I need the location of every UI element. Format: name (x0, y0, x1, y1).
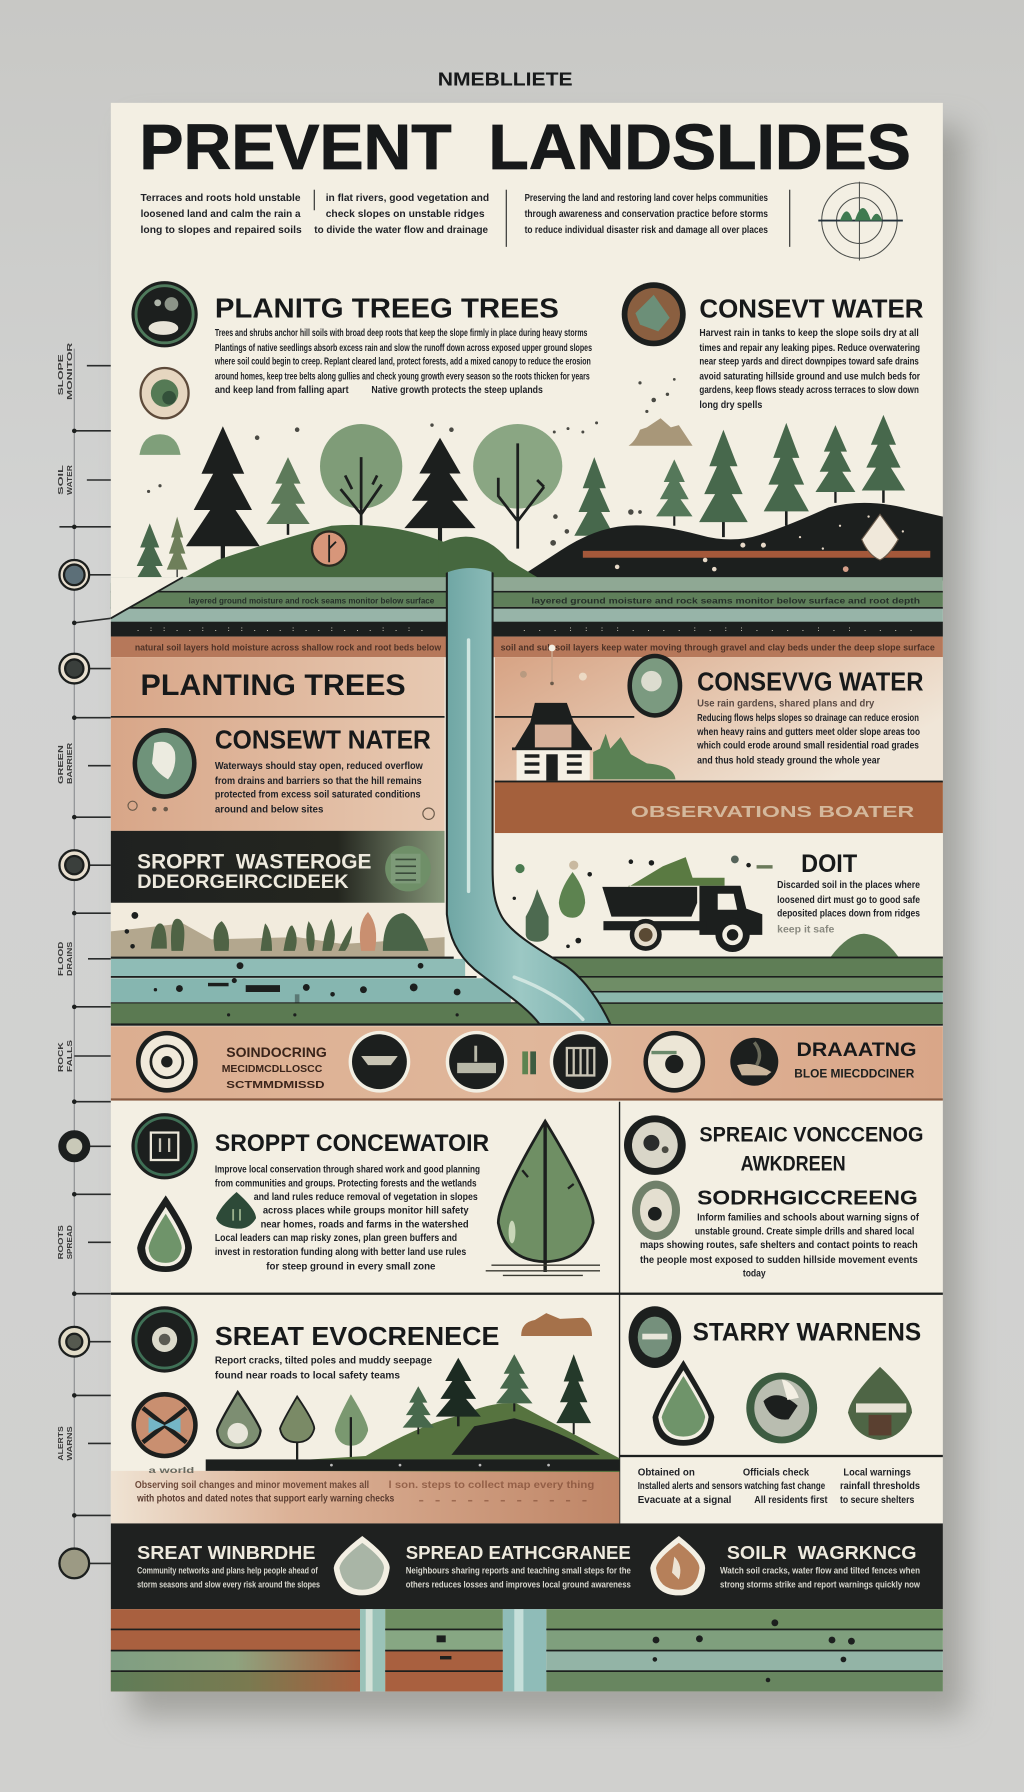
body: doit: deposited places down from ridges (777, 909, 920, 920)
timeline labels: FALLS (65, 1040, 74, 1072)
heading: evidence: SREAT EVOCRENECE (215, 1321, 499, 1351)
body: evidence: Report cracks, tilted poles and muddy seepage (215, 1355, 432, 1366)
soil base (111, 1471, 619, 1523)
section: conserve water (622, 282, 923, 411)
icon: footer peach drop (650, 1536, 705, 1595)
body: conserve left (215, 761, 423, 816)
heading: planting: PLANITG TREEG TREES (215, 293, 559, 324)
heading: support: SROPPT CONCEWATOIR (215, 1130, 489, 1157)
body: speak: maps showing routes, safe shelters and contact points to reach (640, 1240, 918, 1251)
panel: speak awareness (624, 1115, 923, 1280)
icon: brown hill (521, 1313, 592, 1336)
body: warnings columns: Evacuate at a signal (638, 1495, 732, 1506)
body: conserve: long dry spells (699, 400, 763, 411)
timeline labels: MONITOR (65, 342, 74, 400)
heading: warnings: STARRY WARNENS (693, 1319, 921, 1347)
body: planting: around homes, keep tree belts along gullies and check young growth every season so the roots thicken for years (215, 371, 590, 382)
icon: black badge 3 (446, 1031, 507, 1093)
panel: icon strip (111, 1026, 943, 1098)
section: planting trees (131, 281, 592, 418)
body: speak: today (743, 1269, 766, 1280)
body: doit (777, 880, 920, 936)
body: soil text: a world (149, 1466, 194, 1475)
body: support: across places while groups monitor hill safety (263, 1206, 469, 1217)
heading: conserve left: CONSEWT NATER (215, 725, 431, 755)
body: conserve left: protected from excess soil saturated conditions (215, 790, 421, 801)
icon: lamp mark (520, 645, 587, 685)
body: conserving: Reducing flows helps slopes so drainage can reduce erosion (697, 713, 919, 724)
body: planting: and keep land from falling apart (215, 385, 349, 396)
text: strip block right (794, 1039, 917, 1081)
intro text: check slopes on unstable ridges (326, 209, 485, 220)
body: evidence (215, 1355, 432, 1381)
subheading: awareness: AWKDREEN (741, 1150, 846, 1175)
icon: warnings badge (629, 1306, 681, 1368)
heading: planting band: PLANTING TREES (141, 669, 406, 702)
body: conserve: near steep yards and direct downpipes toward safe drains (699, 357, 919, 368)
body: conserving: when heavy rains and gutters meet older slope areas too (696, 727, 920, 738)
timeline labels: DRAINS (65, 942, 74, 976)
body: support: and land rules reduce removal of vegetation in slopes (254, 1192, 478, 1203)
round trees (320, 424, 562, 549)
strip bottom rule (111, 1098, 943, 1101)
bottom strata (111, 1609, 943, 1691)
icon: bottle drop (526, 889, 549, 942)
icon: big leaf tree (498, 1121, 593, 1272)
body: warnings columns: Obtained on (638, 1467, 695, 1478)
icon: cream badge 5 (643, 1031, 705, 1093)
strata small text: . : : . . : . : : . . . : . . : . . . : . : . (137, 626, 423, 633)
panel: support waste storage (111, 831, 445, 903)
hill black layer (206, 1459, 619, 1471)
text: strip block right: BLOE MIECDDCINER (794, 1067, 915, 1081)
river source on hill (439, 539, 507, 576)
body: support: near homes, roads and farms in the watershed (261, 1219, 469, 1230)
timeline labels: GREEN (56, 745, 65, 784)
body: conserve: Harvest rain in tanks to keep the slope soils dry at all (699, 328, 919, 339)
heading: footer right: SOILR WAGRKNCG (727, 1542, 917, 1563)
intro dividers (314, 190, 790, 247)
intro text: Preserving the land and restoring land cover helps communities (525, 193, 768, 204)
icon: leaf badge (848, 1367, 912, 1440)
tree line (133, 415, 905, 594)
panel: planting trees band (111, 657, 445, 717)
timeline labels (56, 342, 74, 1461)
body: conserve: gardens, keep flows steady across terraces to slow down (699, 385, 919, 396)
poster shadow (131, 126, 963, 1717)
body: support: for steep ground in every small zone (266, 1262, 436, 1273)
divider band line (111, 716, 445, 718)
strata small text (135, 596, 935, 652)
timeline labels: WARNS (65, 1426, 74, 1461)
body: warnings columns: Installed alerts and sensors watching fast change (638, 1481, 825, 1492)
panel: conserve water left (111, 718, 445, 831)
illustration: plants strip (111, 903, 445, 957)
icon: compass map (818, 182, 903, 261)
body: soil text: Observing soil changes and minor movement makes all (135, 1480, 369, 1491)
body: warnings columns: rainfall thresholds (840, 1481, 920, 1492)
text: strip block left (222, 1045, 327, 1091)
body: conserving: Use rain gardens, shared plans and dry (697, 698, 875, 709)
text: strip block left: MECIDMCDLLOSCC (222, 1064, 323, 1075)
strata small text: layered ground moisture and rock seams monitor below surface and root depth (531, 596, 920, 605)
strata small text: layered ground moisture and rock seams monitor below surface (189, 596, 435, 605)
body: soil text: l son. steps to collect map every thing (389, 1480, 594, 1491)
hill corner edge (111, 577, 183, 618)
timeline labels: ROOTS (56, 1225, 65, 1259)
body: planting (214, 328, 592, 396)
body: support: from communities and groups. Protecting forests and the wetlands (215, 1178, 477, 1189)
body: warnings columns: All residents first (754, 1495, 828, 1506)
body: conserve: avoid saturating hillside ground and use mulch beds for (699, 371, 920, 382)
warnings rule (619, 1455, 943, 1457)
body: footer right: strong storms strike and report warnings quickly now (720, 1579, 921, 1589)
strata small text: soil and sub soil layers keep water moving through gravel and clay beds under the deep slope surface (501, 642, 935, 652)
icon: small badge (632, 1181, 680, 1240)
bottom water channels (360, 1609, 546, 1691)
intro text: Terraces and roots hold unstable (141, 193, 301, 204)
panel: starry warnings (629, 1306, 921, 1446)
icon: square badge (131, 1113, 198, 1179)
icon: peach hill seal (312, 531, 346, 566)
body: warnings columns: to secure shelters (840, 1495, 915, 1506)
intro text: to reduce individual disaster risk and damage all over places (525, 225, 768, 236)
icon: water badge (622, 282, 686, 346)
underground strata (111, 577, 943, 657)
pines on hill (403, 1354, 591, 1434)
body: footer middle: others reduces losses and improves local ground awareness (406, 1579, 631, 1589)
heading: conserving: CONSEVVG WATER (697, 666, 923, 696)
panel: dirt truck (495, 833, 943, 957)
strata small text: natural soil layers hold moisture across shallow rock and root beds below (135, 642, 442, 652)
body: planting: Trees and shrubs anchor hill soils with broad deep roots that keep the slope firmly in place during heavy storms (215, 328, 588, 339)
body: planting: where soil could begin to creep. Replant cleared land, protect forests, add a mixed canopy to reduce the erosion (214, 357, 591, 368)
icon: large drop (653, 1360, 714, 1446)
icon: dump truck (602, 857, 762, 952)
icon: green bar (522, 1051, 536, 1074)
hill corner cutout (111, 577, 183, 618)
icon: green sheet badge (385, 846, 431, 891)
heading: sodr: SODRHGICCREENG (697, 1187, 918, 1210)
body: speak: Inform families and schools about warning signs of (697, 1213, 919, 1224)
body: planting: Native growth protects the steep uplands (371, 385, 543, 396)
icon: green drop (559, 872, 585, 918)
river highlight (469, 640, 583, 1019)
intro text: to divide the water flow and drainage (314, 225, 488, 236)
body: planting: Plantings of native seedlings absorb excess rain and slow the runoff down across exposed upper ground slopes (215, 343, 592, 354)
heading: footer middle: SPREAD EATHCGRANEE (406, 1542, 631, 1563)
body: doit: loosened dirt must go to good safe (777, 895, 920, 906)
hill (234, 1403, 619, 1472)
body: footer right: Watch soil cracks, water flow and tilted fences when (720, 1566, 920, 1576)
body: doit: keep it safe (777, 925, 835, 936)
body: soil text (135, 1466, 594, 1505)
body: support: Local leaders can map risky zones, plan green buffers and (215, 1233, 457, 1244)
river bed bands right (537, 957, 943, 1024)
text: strip block right: DRAAATNG (797, 1039, 917, 1061)
icon: awareness badge (624, 1115, 686, 1175)
icon: footer drop (334, 1536, 390, 1595)
intro text: long to slopes and repaired soils (141, 225, 302, 236)
body: footer middle: Neighbours sharing reports and teaching small steps for the (406, 1566, 631, 1576)
body: conserving: which could erode around small residential road grades (696, 741, 919, 752)
panel: spread evidence (111, 1306, 619, 1523)
icon: compass badge (131, 1392, 198, 1458)
icon: photo badge (746, 1373, 817, 1443)
text: strip block left: SCTMMDMISSD (226, 1080, 325, 1091)
body: doit: Discarded soil in the places where (777, 880, 920, 891)
body: speak: the people most exposed to sudden hillside movement events (640, 1255, 918, 1266)
text: strip block left: SOINDOCRING (226, 1045, 327, 1060)
icon: black badge 2 (349, 1031, 410, 1093)
heading: waste: SROPRT WASTEROGE (137, 849, 371, 874)
body: footer middle (406, 1566, 631, 1589)
timeline node icons (59, 560, 89, 1578)
icon: brown mountain (629, 418, 693, 446)
heading: doit: DOIT (801, 850, 858, 878)
hills (111, 503, 943, 617)
timeline labels: SLOPE (56, 354, 65, 395)
body: warnings columns: Local warnings (843, 1467, 911, 1478)
doodle: small marks (128, 801, 434, 819)
icon: small green hill (831, 934, 898, 957)
panel: black footer band (111, 1523, 943, 1609)
heading: speak: SPREAIC VONCCENOG (699, 1122, 923, 1147)
timeline labels: ROCK (56, 1041, 65, 1072)
body: conserve left: around and below sites (215, 805, 324, 816)
icon: green drop (137, 1195, 192, 1272)
body: speak (640, 1213, 919, 1280)
icon: black badge 4 (550, 1031, 611, 1093)
body: soil text: . . . . . . . . . . . (417, 1494, 589, 1505)
icon: planting badge (131, 281, 198, 347)
body: evidence: found near roads to local safety teams (215, 1370, 400, 1381)
icon: white leaf (862, 514, 898, 560)
title: PREVENT LANDSLIDES (139, 111, 911, 183)
body: footer left (137, 1566, 320, 1589)
icon: small leaf medallion (141, 368, 189, 418)
icon: cream badge 1 (136, 1031, 198, 1093)
top label: NMEBLLIETE (438, 69, 573, 90)
black hill (514, 503, 943, 581)
intro text: in flat rivers, good vegetation and (326, 193, 489, 204)
timeline labels: BARRIER (65, 742, 74, 784)
poster sheet (111, 103, 943, 1691)
panel: conserving water right (495, 645, 943, 782)
body: conserve left: Waterways should stay open, reduced overflow (215, 761, 423, 772)
icon: water badge right (627, 654, 682, 718)
timeline labels: ALERTS (56, 1426, 65, 1461)
body: conserving (696, 698, 920, 766)
left timeline rail (59, 349, 111, 1563)
body: footer right (720, 1566, 921, 1589)
scattered dots (513, 856, 773, 948)
body: conserving: and thus hold steady ground the whole year (697, 755, 880, 766)
icon: small dark drop (216, 1192, 256, 1229)
panel: support conservation (131, 1113, 600, 1275)
specks near headings (147, 378, 676, 546)
body: soil text: with photos and dated notes that support early warning checks (136, 1494, 395, 1505)
heading: footer left: SREAT WINBRDHE (137, 1542, 315, 1563)
icon: globe badge (133, 728, 197, 799)
grid rules (111, 1102, 943, 1523)
timeline labels: WATER (65, 464, 74, 495)
body: footer left: Community networks and plans help people ahead of (137, 1566, 318, 1576)
timeline labels: SOIL (56, 464, 65, 495)
body: speak: unstable ground. Create simple drills and shared local (695, 1226, 914, 1237)
timeline labels: FLOOD (56, 942, 65, 976)
body: warnings columns (638, 1467, 920, 1506)
body: conserve (699, 328, 920, 411)
body: support: Improve local conservation through shared work and good planning (215, 1165, 480, 1176)
strata small text: . . . : : : : . . . . : . : : . . . . : . : . . . . (523, 626, 912, 633)
green hill (111, 525, 537, 617)
body: footer left: storm seasons and slow every risk around the slopes (137, 1579, 320, 1589)
subheading: waste: DDEORGEIRCCIDEEK (137, 871, 349, 893)
icon: house (512, 703, 592, 781)
heading: conserve: CONSEVT WATER (699, 294, 923, 324)
icon: green bushes (593, 734, 675, 779)
body: conserve left: from drains and barriers so that the hill remains (215, 776, 422, 787)
icon: small green mound (139, 434, 181, 455)
river bed bands left (111, 957, 943, 1026)
icon: evidence badge (131, 1306, 198, 1373)
intro text: through awareness and conservation practice before storms (525, 209, 768, 220)
body: warnings columns: Officials check (743, 1467, 810, 1478)
panel: brown observation band (495, 781, 943, 833)
body: support (215, 1165, 480, 1273)
intro text: loosened land and calm the rain a (141, 209, 301, 220)
ground lines (486, 1265, 600, 1275)
body: support: invest in restoration funding along with better land use rules (215, 1247, 467, 1258)
green pines (133, 415, 905, 594)
faded band text: OBSERVATIONS BOATER (631, 804, 915, 821)
river (447, 565, 610, 1024)
timeline labels: SPREAD (65, 1225, 74, 1259)
dark pines (186, 426, 476, 566)
body: conserve: times and repair any leaking pipes. Reduce overwatering (699, 343, 920, 354)
icon: leaf drops (217, 1392, 368, 1465)
icon: black badge 6 (730, 1038, 778, 1086)
intro text (141, 193, 768, 236)
